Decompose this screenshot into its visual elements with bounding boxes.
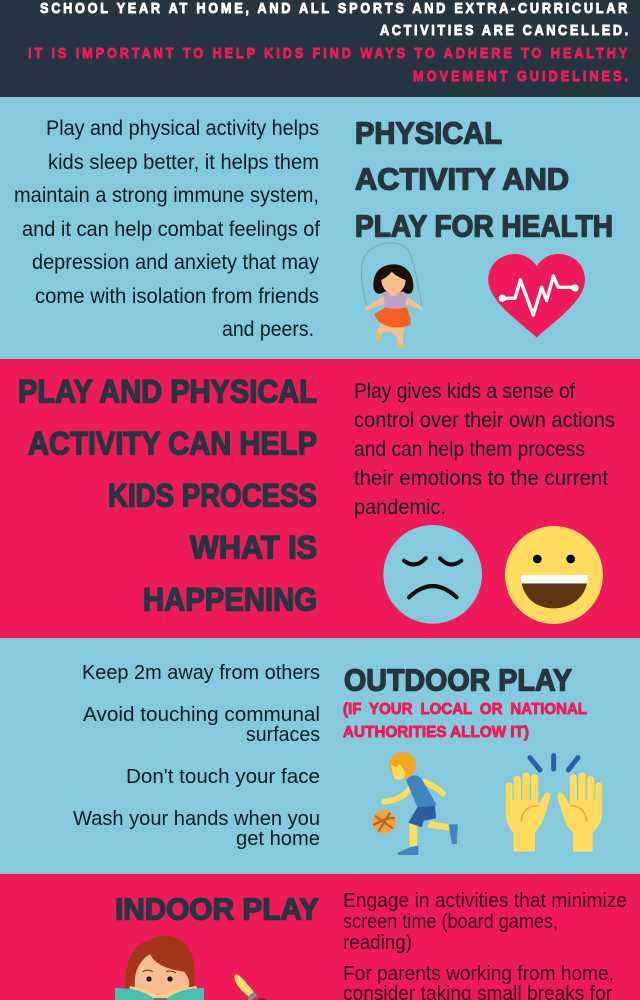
icon: sad face — [383, 525, 482, 624]
body text: sense of control: their emotions to the current — [354, 467, 608, 490]
body text: health benefits: and it can help combat feelings of — [22, 218, 320, 241]
body text: health benefits: Play and physical activity helps — [46, 117, 319, 140]
subheading: authorities note: AUTHORITIES ALLOW IT) — [343, 724, 529, 741]
panel: intro banner — [0, 0, 640, 97]
icon: paintbrush — [234, 974, 266, 1000]
subheading: authorities note — [343, 701, 587, 741]
list: outdoor safety rules: Keep 2m away from others — [82, 662, 320, 684]
body text: health benefits: depression and anxiety that may — [32, 251, 319, 274]
body text: health benefits: and peers. — [222, 318, 314, 341]
icon: happy face — [505, 526, 603, 624]
heading: play can help kids process: HAPPENING — [143, 582, 317, 618]
list: outdoor safety rules: Avoid touching communal — [83, 704, 320, 726]
heading: play can help kids process: KIDS PROCESS — [108, 478, 317, 514]
icon: boy dribbling basketball — [372, 752, 458, 855]
body text: health benefits: maintain a strong immune system, — [14, 184, 319, 207]
body text: indoor suggestions — [343, 890, 627, 1000]
body text: sense of control: Play gives kids a sense of — [354, 380, 575, 403]
body text: sense of control: and can help them process — [354, 438, 585, 461]
icon: raised hands — [506, 756, 602, 852]
heading: play can help kids process: ACTIVITY CAN HELP — [28, 426, 317, 462]
heading: play can help kids process: WHAT IS — [190, 530, 317, 566]
intro text: ACTIVITIES ARE CANCELLED. — [380, 21, 628, 38]
heading: play can help kids process — [18, 374, 317, 618]
list: outdoor safety rules: get home — [236, 828, 320, 850]
body text: sense of control: pandemic. — [354, 496, 446, 519]
intro text: MOVEMENT GUIDELINES. — [413, 67, 628, 84]
icon: heart with pulse line — [488, 254, 585, 337]
body text: indoor suggestions: screen time (board games, — [343, 911, 558, 933]
intro text — [28, 0, 628, 84]
panel: outdoor play — [0, 638, 640, 874]
body text: indoor suggestions: For parents working from home, — [343, 963, 614, 985]
heading: indoor play: INDOOR PLAY — [115, 892, 319, 926]
body text: health benefits — [14, 117, 320, 341]
icon: girl reading book — [115, 936, 204, 1000]
list: outdoor safety rules: surfaces — [246, 724, 320, 746]
heading: physical activity and play for health — [355, 116, 613, 244]
heading: physical activity and play for health: ACTIVITY AND — [355, 162, 569, 196]
icon: girl skipping rope — [361, 243, 423, 349]
body text: sense of control: control over their own actions — [354, 409, 615, 432]
list: outdoor safety rules: Don't touch your face — [126, 766, 320, 788]
body text: health benefits: come with isolation from friends — [35, 285, 319, 308]
intro text: IT IS IMPORTANT TO HELP KIDS FIND WAYS TO ADHERE TO HEALTHY — [28, 44, 628, 61]
heading: physical activity and play for health: PLAY FOR HEALTH — [355, 208, 613, 244]
heading: play can help kids process: PLAY AND PHYSICAL — [18, 374, 317, 410]
heading: outdoor play: OUTDOOR PLAY — [344, 662, 572, 698]
body text: indoor suggestions: reading) — [343, 932, 412, 954]
body text: sense of control — [354, 380, 615, 519]
list: outdoor safety rules: Wash your hands when you — [73, 808, 320, 830]
subheading: authorities note: (IF YOUR LOCAL OR NATIONAL — [343, 701, 587, 718]
body text: health benefits: kids sleep better, it helps them — [48, 151, 319, 174]
list: outdoor safety rules — [73, 662, 320, 850]
body text: indoor suggestions: Engage in activities that minimize — [343, 890, 627, 912]
panel: physical activity for health — [0, 97, 640, 359]
panel: process what is happening — [0, 359, 640, 638]
panel: indoor play — [0, 874, 640, 1000]
heading: physical activity and play for health: PHYSICAL — [355, 116, 502, 150]
